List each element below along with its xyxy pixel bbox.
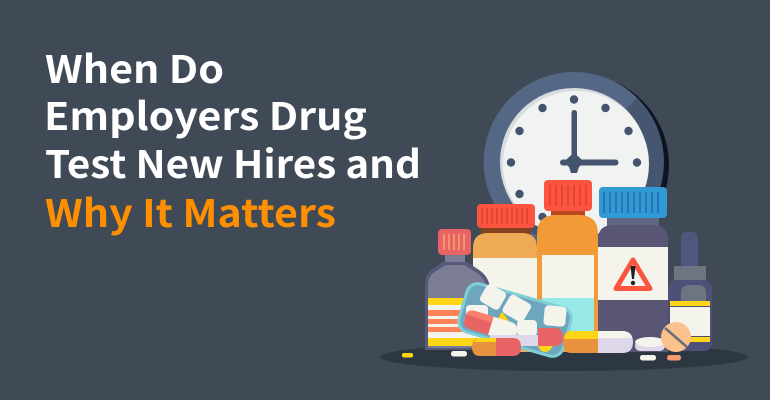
bottle: orange with red cap bbox=[473, 204, 537, 352]
title: When Do bbox=[45, 39, 224, 94]
title: Employers Drug bbox=[44, 86, 367, 141]
small scattered pills bbox=[402, 351, 681, 360]
icon: wall clock bbox=[484, 72, 669, 256]
pill: round scored tablet bbox=[661, 322, 691, 352]
bottle: dropper bbox=[668, 232, 712, 351]
capsule: red and lavender bbox=[490, 328, 563, 346]
title bbox=[44, 39, 421, 238]
capsule: orange and white bbox=[563, 331, 633, 353]
blister pack of pills bbox=[456, 281, 574, 359]
title: Why It Matters bbox=[45, 183, 336, 238]
bottle: large dark with warning label bbox=[598, 187, 668, 352]
bottle: small syrup bbox=[425, 229, 490, 350]
icon: warning triangle bbox=[616, 260, 650, 288]
title: Test New Hires and bbox=[45, 134, 421, 189]
bottle: orange with medicine level bbox=[537, 180, 598, 352]
capsule: red and white tilted bbox=[462, 309, 519, 343]
capsule: orange and red bbox=[472, 338, 521, 356]
pill: flat white tablet bbox=[635, 337, 665, 351]
ground shadow bbox=[380, 343, 748, 371]
